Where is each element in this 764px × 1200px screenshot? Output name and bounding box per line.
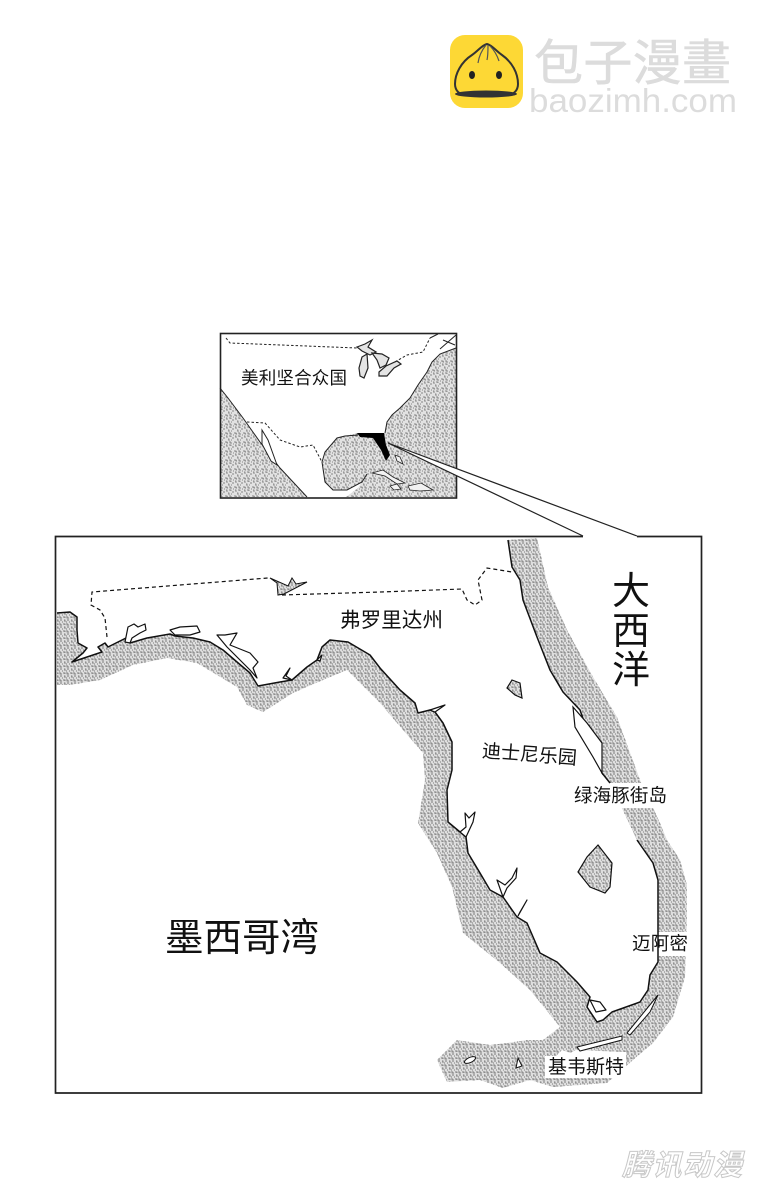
northern bay bbox=[270, 578, 307, 595]
logo name: 包子漫畫 bbox=[534, 37, 731, 91]
label: atlantic bbox=[612, 571, 650, 692]
main map: florida bbox=[57, 538, 690, 1088]
inset label: 美利坚合众国 bbox=[241, 368, 347, 388]
inset sea stipple bbox=[220, 348, 456, 497]
gulf and atlantic stipple band bbox=[57, 538, 687, 1088]
main map frame bbox=[56, 536, 702, 1093]
label: atlantic: 大 bbox=[612, 571, 650, 613]
coastline bbox=[57, 540, 658, 1022]
panhandle bays bbox=[125, 624, 606, 1012]
label: miami: 迈阿密 bbox=[632, 933, 688, 954]
inset coast lines bbox=[220, 348, 456, 497]
label: florida: 弗罗里达州 bbox=[340, 609, 443, 632]
label: dolphin street island: 绿海豚街岛 bbox=[574, 785, 667, 806]
label: key west: 基韦斯特 bbox=[548, 1056, 624, 1078]
inset great lakes bbox=[357, 340, 401, 378]
small lake bbox=[507, 680, 522, 698]
label gaps in stipple bbox=[545, 783, 690, 1078]
inset florida bbox=[357, 433, 390, 461]
logo: baozimh bbox=[450, 35, 737, 119]
inset map: USA bbox=[220, 334, 456, 498]
inset frame bbox=[220, 334, 456, 498]
state border dashed bbox=[91, 568, 512, 637]
inset borders bbox=[226, 338, 430, 462]
icon: yellow bun bbox=[450, 35, 523, 108]
lake okeechobee bbox=[578, 845, 612, 893]
label: disney: 迪士尼乐园 bbox=[481, 740, 578, 769]
watermark: tencent comics: 腾讯动漫 bbox=[622, 1150, 745, 1182]
indian river lagoon bbox=[573, 707, 602, 773]
inset baja california bbox=[262, 430, 277, 465]
florida keys bbox=[464, 995, 658, 1068]
inset northeast coast bbox=[430, 334, 456, 349]
label: gulf of mexico: 墨西哥湾 bbox=[165, 917, 319, 960]
inset cuba and caribbean bbox=[372, 455, 433, 491]
callout wedge lines bbox=[388, 443, 637, 536]
label: atlantic: 西 bbox=[612, 611, 650, 653]
label: atlantic: 洋 bbox=[612, 650, 650, 692]
logo url: baozimh.com bbox=[529, 82, 737, 119]
